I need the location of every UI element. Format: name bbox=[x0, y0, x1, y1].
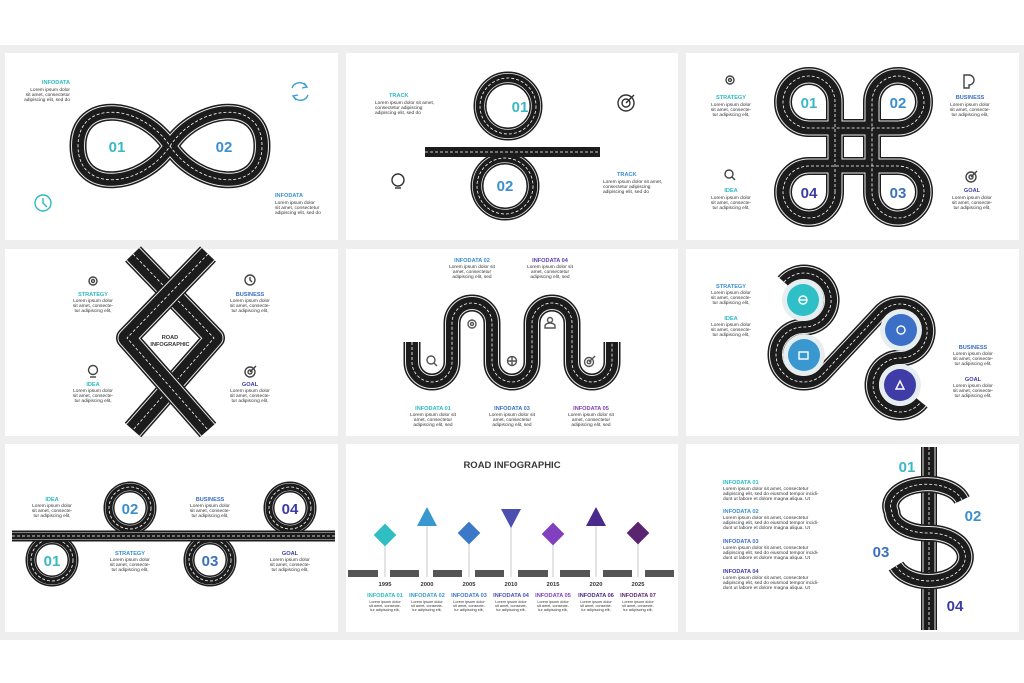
text block: goal: tur adipiscing elit, bbox=[954, 393, 992, 399]
text block: strategy: sit amet, consecte- bbox=[73, 303, 114, 309]
text block: infodata 02: INFODATA 02 bbox=[454, 258, 490, 264]
numbers: 03 bbox=[202, 553, 218, 570]
text block: business bbox=[190, 497, 231, 519]
text block: business: BUSINESS bbox=[956, 95, 985, 101]
title: ROAD INFOGRAPHIC bbox=[463, 460, 561, 471]
text block: strategy: STRATEGY bbox=[78, 292, 108, 298]
road: command symbol bbox=[783, 76, 924, 218]
numbers: 02 bbox=[122, 501, 138, 518]
text block: infodata 01: INFODATA 01 bbox=[415, 406, 451, 412]
text block: idea bbox=[73, 382, 114, 404]
years: 1995 bbox=[379, 582, 392, 588]
text block: goal: tur adipiscing elit, bbox=[953, 205, 991, 211]
timeline labels: tur adipiscing elit, bbox=[412, 608, 442, 612]
text block: track left: consectetur adipiscing bbox=[375, 105, 423, 111]
years: 2020 bbox=[590, 582, 602, 588]
text block: goal: GOAL bbox=[964, 188, 981, 194]
text block: infodata bottom bbox=[275, 193, 321, 216]
timeline labels: INFODATA 03 bbox=[451, 593, 487, 599]
text block: business: Lorem ipsum dolor bbox=[953, 351, 993, 357]
text block: infodata 02: Lorem ipsum dolor sit bbox=[449, 264, 496, 270]
text block: goal: Lorem ipsum dolor bbox=[230, 388, 270, 394]
signs bbox=[374, 507, 649, 546]
text block: goal bbox=[953, 377, 994, 399]
text block: business bbox=[230, 292, 271, 314]
text block: business: Lorem ipsum dolor bbox=[230, 298, 270, 304]
timeline labels: tur adipiscing elit, bbox=[538, 608, 568, 612]
text block: strategy: tur adipiscing elit, bbox=[712, 112, 750, 118]
panel: command loops bbox=[686, 53, 1019, 240]
icon: clock bbox=[35, 195, 51, 211]
text block: strategy bbox=[711, 95, 752, 118]
text block: idea: IDEA bbox=[724, 316, 738, 322]
text block: infodata 04: Lorem ipsum dolor sit bbox=[527, 264, 574, 270]
numbers bbox=[873, 459, 981, 615]
text block: business: tur adipiscing elit, bbox=[951, 112, 989, 118]
text block: infodata top: adipiscing elit, sed do bbox=[24, 97, 70, 103]
text block: business: sit amet, consecte- bbox=[950, 107, 991, 113]
numbers: 03 bbox=[873, 544, 889, 561]
icons bbox=[725, 75, 977, 182]
timeline labels: Lorem ipsum dolor bbox=[495, 600, 527, 604]
text block: business: sit amet, consecte- bbox=[953, 356, 994, 362]
text block: goal: sit amet, consecte- bbox=[952, 200, 993, 206]
text block: goal: GOAL bbox=[242, 382, 259, 388]
road: crossing X bbox=[127, 254, 214, 430]
numbers: 04 bbox=[947, 598, 964, 615]
text block: infodata list: dunt ut labore et dolore magna aliqua. Ut bbox=[723, 585, 811, 591]
years: 2010 bbox=[505, 582, 517, 588]
text block: infodata list: INFODATA 01 bbox=[723, 480, 759, 486]
text block: strategy: STRATEGY bbox=[115, 551, 145, 557]
text block: track left bbox=[375, 93, 434, 116]
text block: goal: Lorem ipsum dolor bbox=[953, 383, 993, 389]
text block: goal: GOAL bbox=[282, 551, 299, 557]
road: dollar sign bbox=[891, 447, 965, 630]
road: infinity loop bbox=[78, 112, 262, 180]
number 02: 02 bbox=[497, 178, 513, 195]
text block: idea: tur adipiscing elit, bbox=[712, 205, 750, 211]
text block: goal: tur adipiscing elit, bbox=[271, 567, 309, 573]
text block: infodata 05: adipiscing elit, sed bbox=[571, 422, 611, 428]
road: track loops bbox=[425, 78, 600, 214]
timeline labels: sit amet, consecte- bbox=[495, 604, 528, 608]
text block: strategy: Lorem ipsum dolor bbox=[110, 557, 150, 563]
numbers: 04 bbox=[801, 185, 818, 202]
text block: infodata 01: Lorem ipsum dolor sit bbox=[410, 412, 457, 418]
years: 2005 bbox=[463, 582, 476, 588]
text block: infodata list: Lorem ipsum dolor sit amet, consectetur bbox=[723, 545, 809, 551]
panel: road with loops bbox=[5, 444, 338, 632]
label: road infographic: ROAD bbox=[162, 335, 178, 341]
icon: bulb bbox=[392, 174, 404, 188]
numbers bbox=[44, 501, 299, 570]
text block: infodata bottom: INFODATA bbox=[275, 193, 303, 199]
text block: infodata 03: adipiscing elit, sed bbox=[492, 422, 532, 428]
text block: infodata 04: amet, consectetur bbox=[531, 269, 569, 275]
text block: goal bbox=[952, 188, 993, 211]
text block: goal: GOAL bbox=[965, 377, 982, 383]
text block: infodata list: adipiscing elit, sed do eiusmod tempor incidi- bbox=[723, 580, 819, 586]
text block: strategy: Lorem ipsum dolor bbox=[73, 298, 113, 304]
text block: track right: TRACK bbox=[617, 172, 637, 178]
timeline labels: Lorem ipsum dolor bbox=[453, 600, 485, 604]
text block: idea: Lorem ipsum dolor bbox=[32, 503, 72, 509]
text block: infodata list: INFODATA 02 bbox=[723, 509, 759, 515]
text block: infodata 04: adipiscing elit, sed bbox=[530, 274, 570, 280]
timeline labels: INFODATA 07 bbox=[620, 593, 656, 599]
text block: track left: TRACK bbox=[389, 93, 409, 99]
text block: strategy: Lorem ipsum dolor bbox=[711, 290, 751, 296]
text block: goal: Lorem ipsum dolor bbox=[952, 195, 992, 201]
text block: business bbox=[953, 345, 994, 367]
icons bbox=[427, 318, 595, 366]
text block: goal bbox=[270, 551, 311, 573]
text block: infodata top: sit amet, consectetur bbox=[26, 92, 70, 98]
text block: infodata 02: amet, consectetur bbox=[453, 269, 491, 275]
icon: refresh bbox=[292, 83, 308, 100]
text block: infodata 03 bbox=[489, 406, 536, 428]
text block: infodata list: INFODATA 03 bbox=[723, 539, 759, 545]
text block: business bbox=[950, 95, 991, 118]
text block: infodata top bbox=[24, 80, 70, 103]
text block: strategy: sit amet, consecte- bbox=[110, 562, 151, 568]
text block: infodata 04: INFODATA 04 bbox=[532, 258, 569, 264]
timeline labels: tur adipiscing elit, bbox=[496, 608, 526, 612]
text block: track left: Lorem ipsum dolor sit amet, bbox=[375, 100, 434, 106]
text block: idea: tur adipiscing elit, bbox=[712, 332, 750, 338]
text block: infodata 04 bbox=[527, 258, 574, 280]
text block: infodata list: adipiscing elit, sed do eiusmod tempor incidi- bbox=[723, 491, 819, 497]
timeline labels: sit amet, consecte- bbox=[537, 604, 570, 608]
text block: strategy bbox=[73, 292, 114, 314]
panel: infinity bbox=[5, 53, 338, 240]
text block: infodata list: INFODATA 04 bbox=[723, 569, 760, 575]
text block: track right: consectetur adipiscing bbox=[603, 184, 651, 190]
text block: goal: sit amet, consecte- bbox=[953, 388, 994, 394]
text block: infodata list: dunt ut labore et dolore magna aliqua. Ut bbox=[723, 496, 811, 502]
text block: idea: Lorem ipsum dolor bbox=[711, 322, 751, 328]
text block: idea: sit amet, consecte- bbox=[73, 393, 114, 399]
text block: infodata 05: INFODATA 05 bbox=[573, 406, 609, 412]
text block: infodata list bbox=[723, 480, 819, 591]
text block: infodata 01: adipiscing elit, sed bbox=[413, 422, 453, 428]
text block: idea: IDEA bbox=[45, 497, 59, 503]
numbers: 04 bbox=[282, 501, 299, 518]
text block: infodata 01: amet, consectetur bbox=[414, 417, 452, 423]
text block: infodata list: dunt ut labore et dolore magna aliqua. Ut bbox=[723, 525, 811, 531]
text block: business: BUSINESS bbox=[236, 292, 265, 298]
timeline labels: INFODATA 06 bbox=[578, 593, 614, 599]
timeline labels: tur adipiscing elit, bbox=[623, 608, 653, 612]
text block: strategy: tur adipiscing elit, bbox=[712, 300, 750, 306]
text block: track right: adipiscing elit, sed do bbox=[603, 189, 649, 195]
text block: idea bbox=[711, 188, 752, 211]
text block: goal: sit amet, consecte- bbox=[230, 393, 271, 399]
text block: infodata 03: INFODATA 03 bbox=[494, 406, 530, 412]
years: 2015 bbox=[547, 582, 560, 588]
icons bbox=[88, 275, 256, 377]
text block: infodata list: Lorem ipsum dolor sit amet, consectetur bbox=[723, 486, 809, 492]
road: serpentine bbox=[412, 303, 612, 382]
text block: business: tur adipiscing elit, bbox=[954, 361, 992, 367]
text block: infodata list: adipiscing elit, sed do eiusmod tempor incidi- bbox=[723, 550, 819, 556]
number 01: 01 bbox=[512, 99, 528, 116]
numbers: 02 bbox=[890, 95, 906, 112]
text block: infodata bottom: sit amet, consectetur bbox=[275, 205, 320, 211]
timeline labels: INFODATA 01 bbox=[367, 593, 403, 599]
timeline labels: Lorem ipsum dolor bbox=[369, 600, 401, 604]
text block: strategy bbox=[711, 284, 752, 306]
text block: infodata 02: adipiscing elit, sed bbox=[452, 274, 492, 280]
panel: dollar road bbox=[686, 444, 1019, 632]
text block: strategy: sit amet, consecte- bbox=[711, 107, 752, 113]
text block: infodata 03: amet, consectetur bbox=[493, 417, 531, 423]
text block: strategy bbox=[110, 551, 151, 573]
text block: idea bbox=[711, 316, 752, 338]
text block: infodata 01 bbox=[410, 406, 457, 428]
timeline labels: sit amet, consecte- bbox=[622, 604, 655, 608]
text block: goal: Lorem ipsum dolor bbox=[270, 557, 310, 563]
text block: idea bbox=[32, 497, 73, 519]
numbers bbox=[801, 95, 906, 202]
timeline labels: tur adipiscing elit, bbox=[454, 608, 484, 612]
text block: infodata list: Lorem ipsum dolor sit amet, consectetur bbox=[723, 575, 809, 581]
text block: business: BUSINESS bbox=[959, 345, 988, 351]
text block: idea: sit amet, consecte- bbox=[32, 508, 73, 514]
text block: business: sit amet, consecte- bbox=[230, 303, 271, 309]
timeline labels: sit amet, consecte- bbox=[411, 604, 444, 608]
label: road infographic: INFOGRAPHIC bbox=[150, 342, 190, 348]
text block: idea: sit amet, consecte- bbox=[711, 327, 752, 333]
poles bbox=[385, 517, 638, 577]
numbers: 02 bbox=[965, 508, 981, 525]
panel: crossing roads bbox=[5, 249, 338, 436]
timeline labels: sit amet, consecte- bbox=[580, 604, 613, 608]
text block: infodata list: dunt ut labore et dolore magna aliqua. Ut bbox=[723, 555, 811, 561]
text block: infodata bottom: Lorem ipsum dolor bbox=[275, 200, 315, 206]
text block: goal: tur adipiscing elit, bbox=[231, 398, 269, 404]
text block: business: Lorem ipsum dolor bbox=[950, 102, 990, 108]
text block: strategy: sit amet, consecte- bbox=[711, 295, 752, 301]
label: road infographic bbox=[150, 335, 190, 348]
timeline labels: Lorem ipsum dolor bbox=[580, 600, 612, 604]
years bbox=[379, 582, 645, 588]
text block: business: tur adipiscing elit, bbox=[191, 513, 229, 519]
circle icons bbox=[782, 279, 922, 406]
number 01: 01 bbox=[109, 139, 125, 156]
text block: infodata 05: amet, consectetur bbox=[572, 417, 610, 423]
timeline labels: INFODATA 04 bbox=[493, 593, 530, 599]
numbers: 03 bbox=[890, 185, 906, 202]
text block: idea: tur adipiscing elit, bbox=[74, 398, 112, 404]
panel: serpentine bbox=[346, 249, 678, 436]
text block: idea: IDEA bbox=[724, 188, 738, 194]
text block: track right bbox=[603, 172, 662, 195]
text block: strategy: tur adipiscing elit, bbox=[74, 308, 112, 314]
text block: infodata top: INFODATA bbox=[42, 80, 70, 86]
text block: business: Lorem ipsum dolor bbox=[190, 503, 230, 509]
text block: track left: adipiscing elit, sed do bbox=[375, 110, 421, 116]
text block: business: tur adipiscing elit, bbox=[231, 308, 269, 314]
text block: infodata list: adipiscing elit, sed do eiusmod tempor incidi- bbox=[723, 520, 819, 526]
text block: idea: Lorem ipsum dolor bbox=[73, 388, 113, 394]
text block: idea: Lorem ipsum dolor bbox=[711, 195, 751, 201]
text block: strategy: Lorem ipsum dolor bbox=[711, 102, 751, 108]
road: s-curve bbox=[776, 273, 927, 412]
text block: infodata top: Lorem ipsum dolor bbox=[30, 87, 70, 93]
text block: strategy: STRATEGY bbox=[716, 284, 746, 290]
text block: infodata list: Lorem ipsum dolor sit amet, consectetur bbox=[723, 515, 809, 521]
road segments bbox=[348, 570, 674, 577]
timeline labels: sit amet, consecte- bbox=[369, 604, 402, 608]
text block: infodata bottom: adipiscing elit, sed do bbox=[275, 210, 321, 216]
numbers: 01 bbox=[899, 459, 915, 476]
timeline labels: tur adipiscing elit, bbox=[581, 608, 611, 612]
timeline labels: sit amet, consecte- bbox=[453, 604, 486, 608]
icon: target bbox=[618, 95, 634, 111]
timeline labels: Lorem ipsum dolor bbox=[537, 600, 569, 604]
numbers: 01 bbox=[44, 553, 60, 570]
text block: idea: sit amet, consecte- bbox=[711, 200, 752, 206]
road: loops bbox=[12, 487, 335, 581]
text block: goal bbox=[230, 382, 271, 404]
text block: infodata 02 bbox=[449, 258, 496, 280]
panel: timeline bbox=[346, 444, 678, 632]
text block: strategy: tur adipiscing elit, bbox=[111, 567, 149, 573]
text block: infodata 05: Lorem ipsum dolor sit bbox=[568, 412, 615, 418]
timeline labels: Lorem ipsum dolor bbox=[411, 600, 443, 604]
timeline labels: INFODATA 02 bbox=[409, 593, 445, 599]
panel: s-curve with circles bbox=[686, 249, 1019, 436]
text block: idea: IDEA bbox=[86, 382, 100, 388]
text block: strategy: STRATEGY bbox=[716, 95, 746, 101]
text block: goal: sit amet, consecte- bbox=[270, 562, 311, 568]
timeline labels: INFODATA 05 bbox=[535, 593, 571, 599]
text block: idea: tur adipiscing elit, bbox=[33, 513, 71, 519]
timeline labels bbox=[367, 593, 656, 612]
text block: infodata 05 bbox=[568, 406, 615, 428]
text block: business: sit amet, consecte- bbox=[190, 508, 231, 514]
years: 2000 bbox=[421, 582, 433, 588]
text block: business: BUSINESS bbox=[196, 497, 225, 503]
numbers: 01 bbox=[801, 95, 817, 112]
timeline labels: tur adipiscing elit, bbox=[370, 608, 400, 612]
panel: track bbox=[346, 53, 678, 240]
number 02: 02 bbox=[216, 139, 232, 156]
years: 2025 bbox=[632, 582, 645, 588]
timeline labels: Lorem ipsum dolor bbox=[622, 600, 654, 604]
text block: track right: Lorem ipsum dolor sit amet, bbox=[603, 179, 662, 185]
text block: infodata 03: Lorem ipsum dolor sit bbox=[489, 412, 536, 418]
